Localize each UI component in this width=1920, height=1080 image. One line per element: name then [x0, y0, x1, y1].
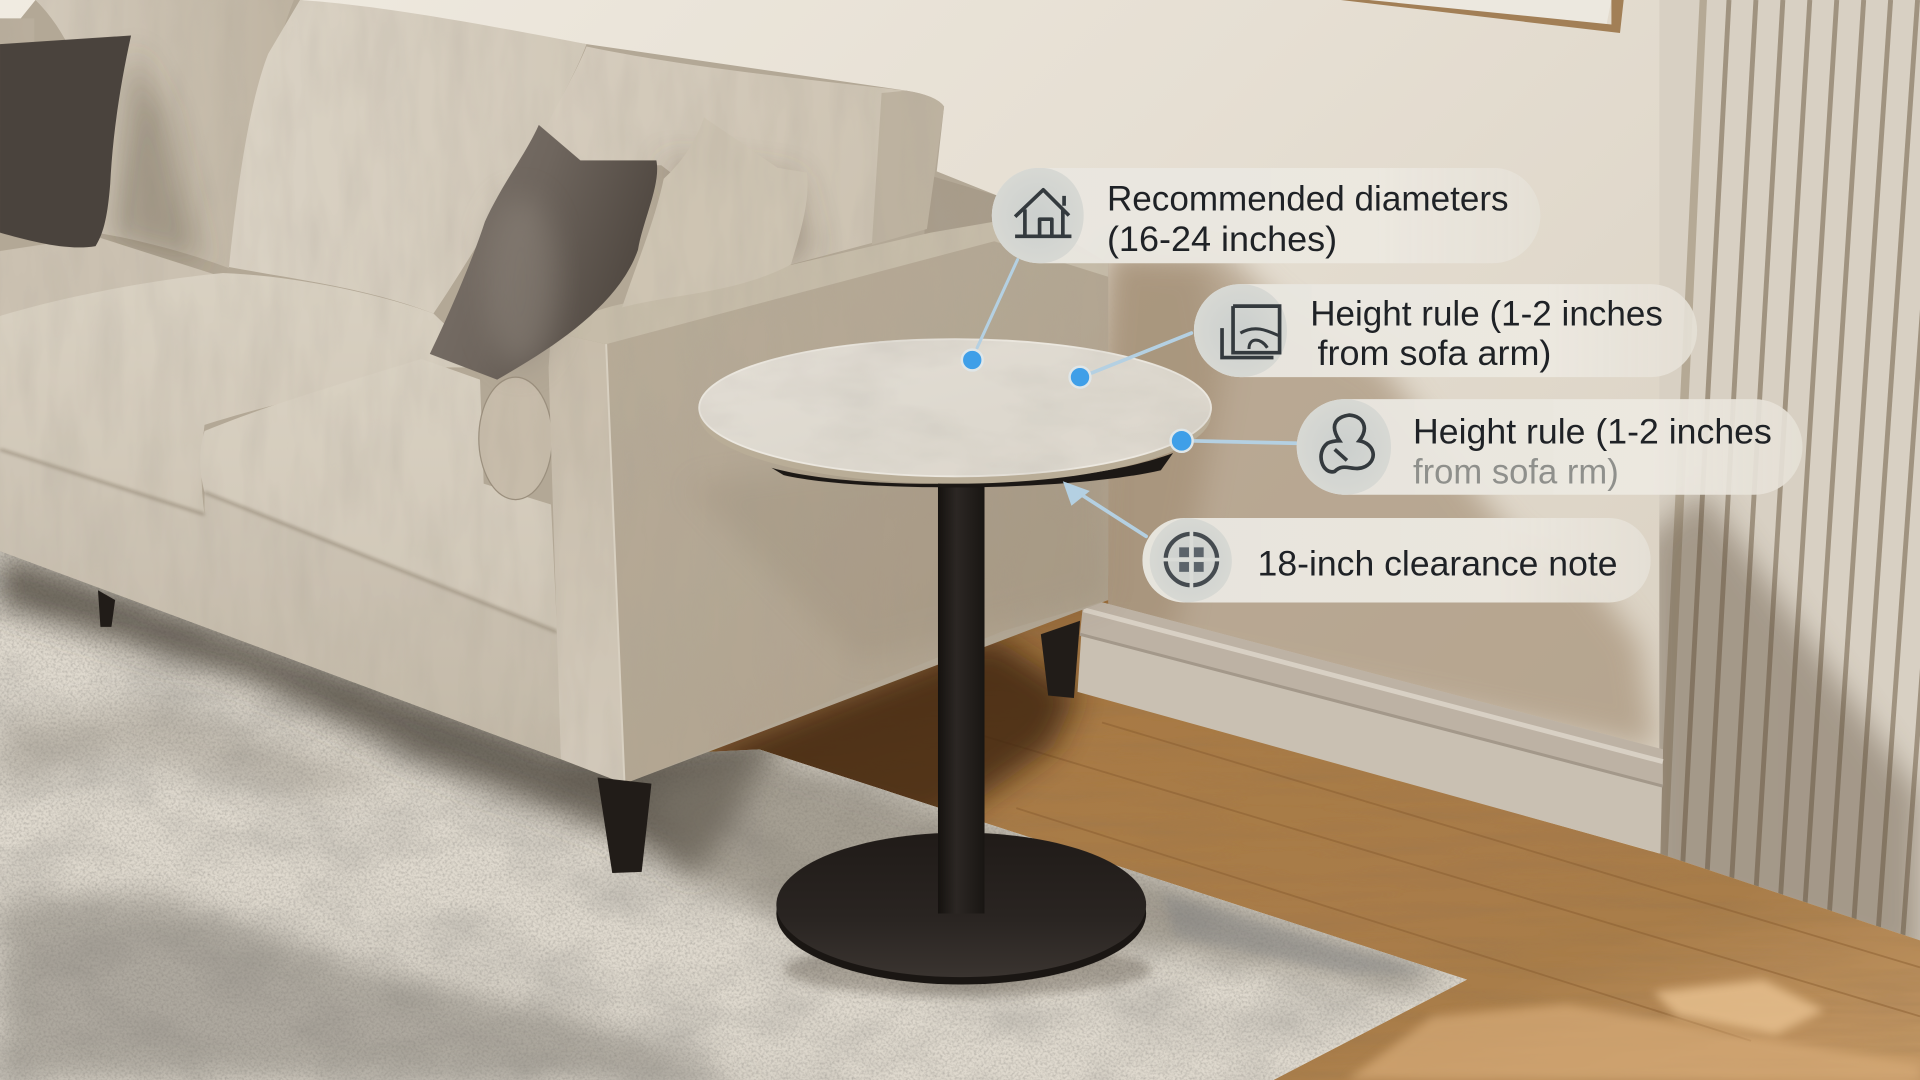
- label text two: Height rule (1-2 inches: [1310, 294, 1663, 334]
- label text four: 18-inch clearance note: [1258, 544, 1618, 584]
- grey pillow: [430, 125, 657, 380]
- left dark pillow: [0, 36, 131, 247]
- label text two: from sofa arm): [1318, 333, 1551, 373]
- callout: recommended diameters: [992, 168, 1540, 263]
- icon: blob: [1321, 415, 1373, 472]
- callout dot three: [1171, 430, 1193, 452]
- marble top: [699, 339, 1211, 476]
- icon: chair frame: [1222, 306, 1280, 358]
- sofa legs: [98, 590, 1080, 873]
- label text three: from sofa rm): [1413, 452, 1619, 492]
- icon: target: [1163, 531, 1220, 588]
- sofa back cushions: [0, 0, 998, 313]
- fluted wall panel: [1659, 0, 1920, 940]
- framed picture on the wall: [1341, 0, 1624, 33]
- label text three: [1413, 411, 1772, 492]
- beige pillow: [622, 118, 808, 307]
- callout dot two: [1070, 367, 1090, 388]
- arm: [549, 222, 1108, 784]
- wood floor: [576, 576, 1920, 1080]
- sofa: [0, 0, 1108, 873]
- callout: clearance note: [1142, 518, 1651, 602]
- shadow below tabletop: [771, 453, 1173, 487]
- label text one: [1107, 179, 1509, 259]
- label text one: (16-24 inches): [1107, 219, 1337, 259]
- icon: house: [1015, 190, 1071, 236]
- seat cushions: [0, 236, 561, 759]
- table base disc: [776, 833, 1146, 984]
- baseboard: [1078, 598, 1663, 853]
- shadows on sofa back: [110, 49, 814, 294]
- side table: [699, 339, 1211, 997]
- table top edge: [699, 347, 1211, 484]
- label text two: [1310, 294, 1663, 373]
- callout: height rule: [1194, 284, 1697, 377]
- rug: [0, 551, 1467, 1080]
- bolster: [479, 377, 552, 500]
- sofa underlay: [0, 0, 1108, 784]
- label text three: Height rule (1-2 inches: [1413, 411, 1772, 451]
- label text one: Recommended diameters: [1107, 179, 1509, 219]
- callout connectors: [977, 260, 1297, 536]
- table base shadow: [784, 943, 1151, 997]
- callout dot one: [962, 350, 983, 370]
- table pole: [938, 480, 984, 913]
- callout: height rule faded: [1297, 399, 1802, 495]
